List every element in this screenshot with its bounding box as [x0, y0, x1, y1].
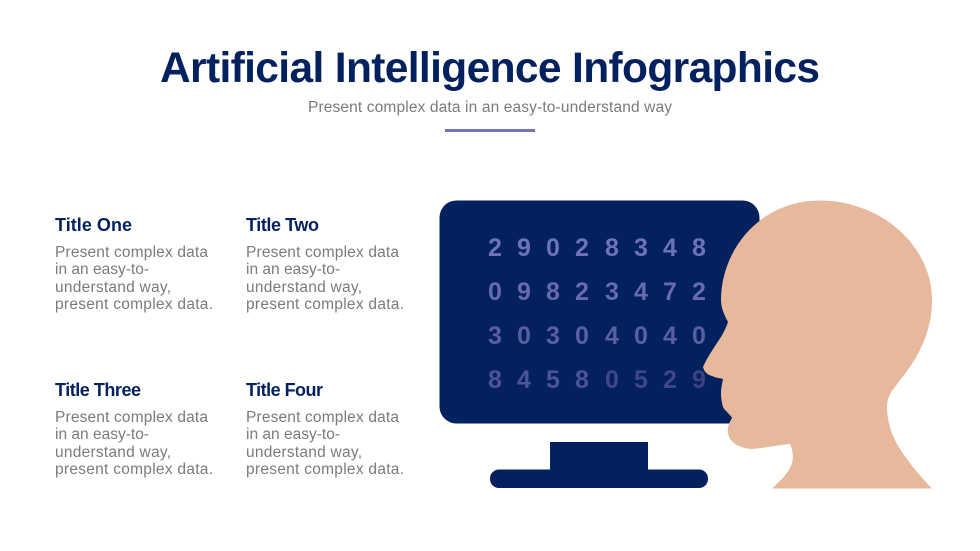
text block: title two: Title Two [246, 215, 319, 235]
text block: title three: present complex data. [55, 461, 213, 478]
text block: title three: in an easy-to- [55, 426, 149, 443]
screen digits: 3 [634, 234, 648, 262]
text block: title two: understand way, [246, 279, 362, 296]
screen digits: 9 [517, 278, 531, 306]
text block: title four [246, 380, 404, 478]
text block: title four: present complex data. [246, 461, 404, 478]
screen digits: 2 [575, 278, 589, 306]
text block: title one: understand way, [55, 279, 171, 296]
screen digits: 8 [546, 278, 560, 306]
text block: title three: Present complex data [55, 409, 208, 426]
screen digits: 2 [575, 234, 589, 262]
text block: title three: understand way, [55, 444, 171, 461]
screen digits: 4 [634, 278, 648, 306]
monitor [440, 200, 760, 488]
monitor neck [550, 442, 648, 472]
screen digits: 4 [605, 322, 619, 350]
monitor screen [440, 200, 760, 424]
screen digits: 5 [634, 366, 648, 394]
screen digits: 3 [605, 278, 619, 306]
screen digits [488, 234, 706, 394]
screen digits: 0 [575, 322, 589, 350]
text block: title three: Title Three [55, 380, 141, 400]
screen digits: 8 [692, 234, 706, 262]
screen digits: 9 [692, 366, 706, 394]
screen digits: 4 [663, 322, 677, 350]
text block: title four: Title Four [246, 380, 323, 400]
text block: title four: in an easy-to- [246, 426, 340, 443]
text block: title one [55, 215, 213, 313]
subtitle: Present complex data in an easy-to-understand way [308, 99, 672, 116]
screen digits: 3 [488, 322, 502, 350]
text block: title two [246, 215, 404, 313]
screen digits: 4 [663, 234, 677, 262]
screen digits: 5 [546, 366, 560, 394]
text block: title one: in an easy-to- [55, 261, 149, 278]
screen digits: 0 [517, 322, 531, 350]
screen digits: 0 [634, 322, 648, 350]
head silhouette [703, 200, 932, 488]
title underline [445, 129, 535, 132]
screen digits: 0 [546, 234, 560, 262]
text block: title one: Title One [55, 215, 132, 235]
screen digits: 8 [575, 366, 589, 394]
text block: title one: present complex data. [55, 296, 213, 313]
screen digits: 2 [488, 234, 502, 262]
screen digits: 2 [663, 366, 677, 394]
screen digits: 0 [605, 366, 619, 394]
screen digits: 0 [488, 278, 502, 306]
screen digits: 4 [517, 366, 531, 394]
screen digits: 8 [605, 234, 619, 262]
screen digits: 7 [663, 278, 677, 306]
screen digits: 9 [517, 234, 531, 262]
text block: title four: understand way, [246, 444, 362, 461]
text block: title two: in an easy-to- [246, 261, 340, 278]
text block: title two: present complex data. [246, 296, 404, 313]
screen digits: 8 [488, 366, 502, 394]
screen digits: 0 [692, 322, 706, 350]
screen digits: 2 [692, 278, 706, 306]
text block: title three [55, 380, 213, 478]
text block: title two: Present complex data [246, 244, 399, 261]
monitor base [490, 470, 708, 488]
text block: title one: Present complex data [55, 244, 208, 261]
title: Artificial Intelligence Infographics [160, 45, 820, 92]
text block: title four: Present complex data [246, 409, 399, 426]
screen digits: 3 [546, 322, 560, 350]
